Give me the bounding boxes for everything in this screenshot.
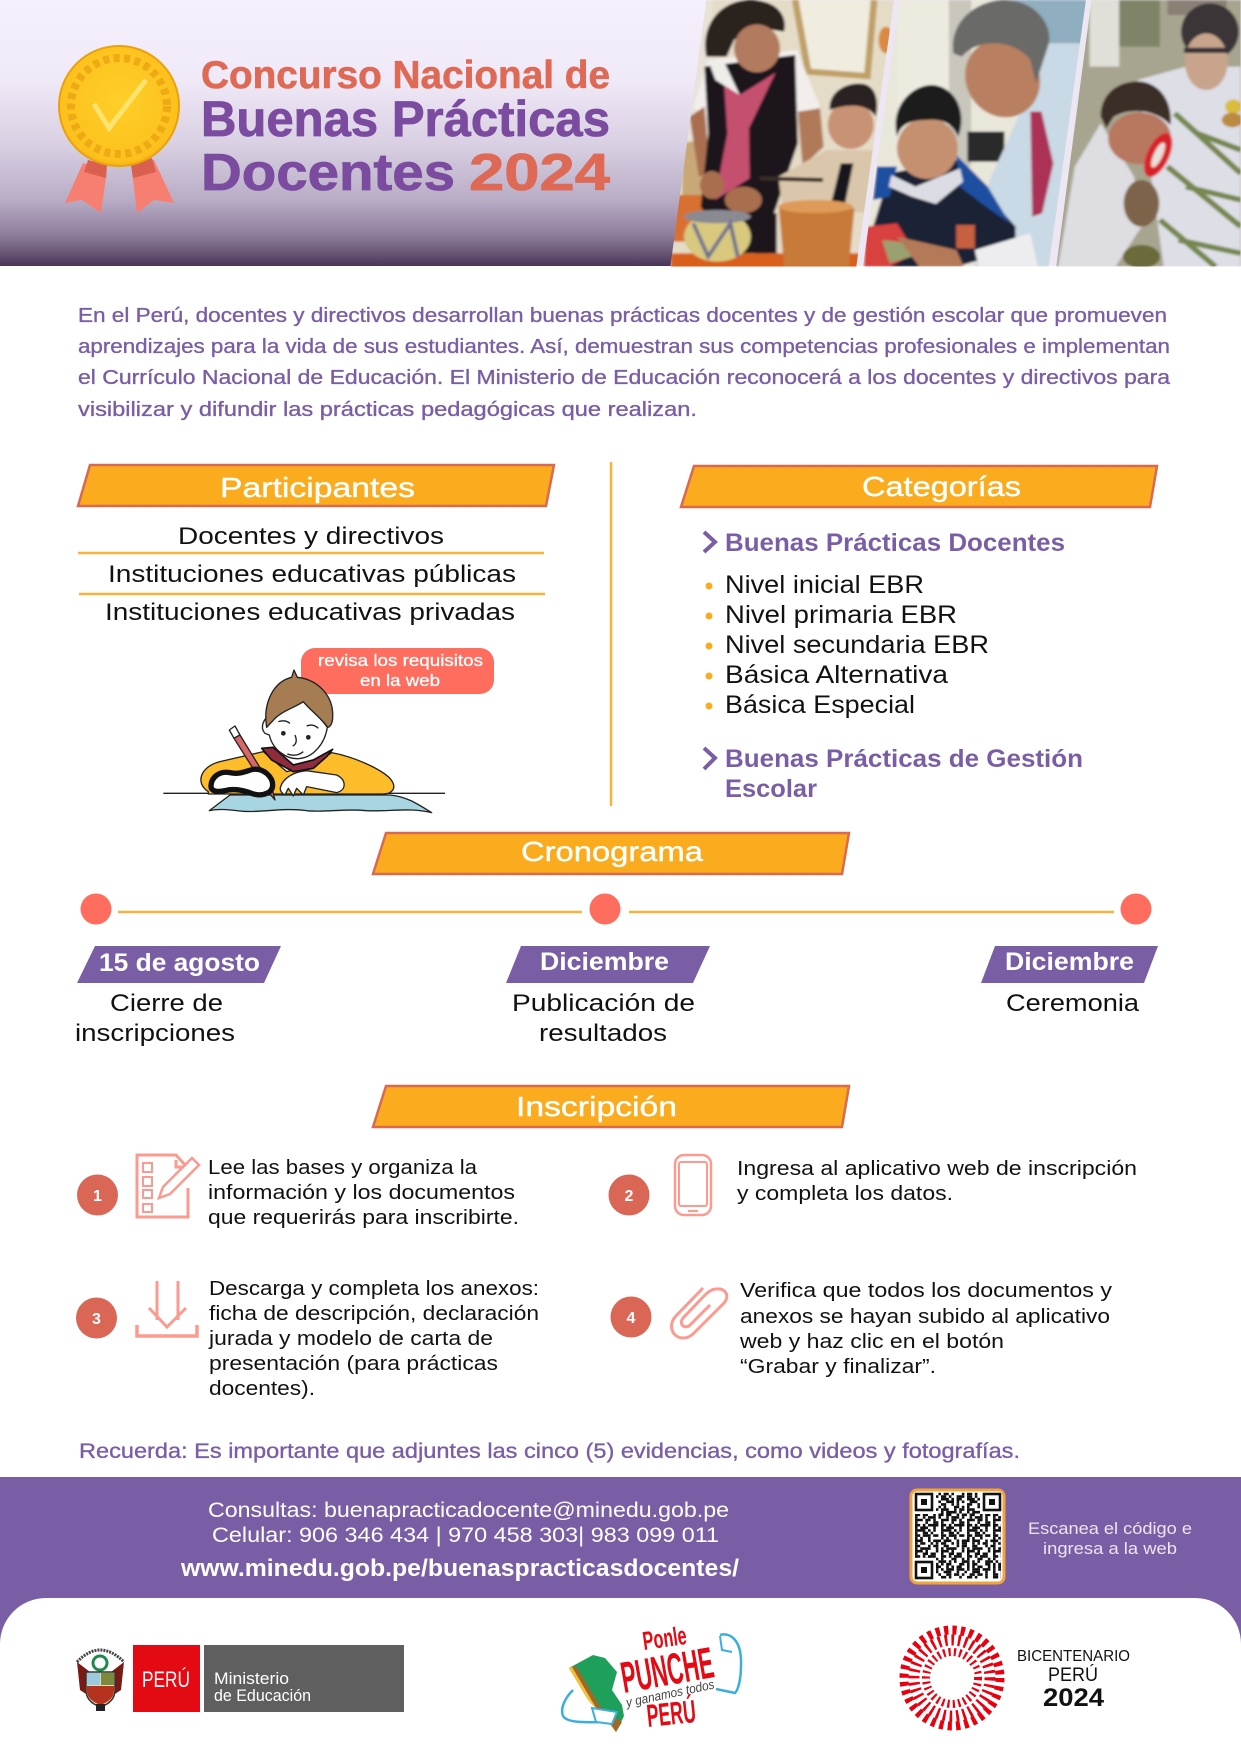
badge 3: [76, 1298, 117, 1338]
milestone: cierre de inscripciones: Cierre de: [110, 990, 223, 1017]
step 1 text: [208, 1157, 519, 1229]
logo: bicentenario perú 2024: 2024: [1043, 1684, 1104, 1712]
step 3 text: [208, 1278, 539, 1400]
qr caption: ingresa a la web: [1043, 1539, 1177, 1558]
step 1 text: Lee las bases y organiza la: [208, 1157, 478, 1179]
step 4 text: Verifica que todos los documentos y: [740, 1280, 1112, 1302]
badge 4: 4: [627, 1310, 636, 1327]
logo: bicentenario perú 2024: BICENTENARIO: [1017, 1648, 1130, 1665]
icon: gold medal: [59, 46, 179, 213]
timeline: [80, 894, 1152, 924]
category: buenas prácticas de gestión escolar: Buenas Prácticas de Gestión: [725, 745, 1083, 773]
title: 2024: [469, 144, 610, 202]
callout: revisa los requisitos: revisa los requisitos: [318, 651, 483, 670]
logo: perú ministerio de educación: Ministerio: [214, 1669, 289, 1688]
logo: ponle punche perú: y ganamos todos: [624, 1676, 716, 1710]
milestone: cierre de inscripciones: 15 de agosto: [99, 949, 260, 977]
qr caption: Escanea el código e: [1028, 1519, 1192, 1538]
participants list: Docentes y directivos: [178, 523, 444, 550]
heading: inscripción: Inscripción: [516, 1091, 677, 1122]
photo: teacher and boy with toy: [860, 0, 1090, 267]
qr caption: [1028, 1519, 1192, 1558]
logo: ponle punche perú: [562, 1620, 741, 1734]
intro paragraph: [78, 305, 1171, 421]
milestone: publicación de resultados: [506, 946, 710, 1047]
contact text: Celular: 906 346 434 | 970 458 303| 983 099 011: [212, 1524, 719, 1547]
intro paragraph: aprendizajes para la vida de sus estudiantes. Así, demuestran sus competencias profesionales e implementan: [78, 336, 1170, 358]
heading: cronograma: Cronograma: [521, 836, 703, 867]
logo: ponle punche perú: PERÚ: [645, 1693, 697, 1734]
photo collage: [660, 0, 1241, 268]
participants list: [78, 523, 545, 626]
panel: participantes: [78, 465, 554, 813]
logo: bicentenario perú 2024: [904, 1630, 1130, 1726]
category: buenas prácticas docentes: Buenas Prácticas Docentes: [725, 529, 1065, 557]
photo: teacher and boy with magnifying glass: [1053, 0, 1241, 268]
milestone: ceremonia: Ceremonia: [1006, 990, 1140, 1017]
icon: smartphone: [675, 1155, 711, 1215]
step 1 text: información y los documentos: [208, 1182, 515, 1204]
heading: participantes: [78, 465, 554, 506]
badge 2: 2: [625, 1188, 634, 1205]
panel: categorías: [681, 466, 1157, 803]
levels list: [706, 571, 989, 719]
header banner: [0, 0, 1241, 268]
callout: revisa los requisitos: [301, 648, 494, 694]
milestone: publicación de resultados: Diciembre: [540, 948, 669, 976]
heading: participantes: Participantes: [220, 472, 415, 503]
intro paragraph: visibilizar y difundir las prácticas pedagógicas que realizan.: [78, 399, 697, 421]
step 1 text: que requerirás para inscribirte.: [208, 1207, 519, 1229]
step 4 text: web y haz clic en el botón: [739, 1331, 1004, 1353]
levels list: Básica Alternativa: [725, 661, 948, 689]
milestone: publicación de resultados: Publicación de: [512, 990, 695, 1017]
icon: download: [137, 1281, 197, 1336]
contact text: www.minedu.gob.pe/buenaspracticasdocentes/: [180, 1555, 739, 1582]
step 3 text: docentes).: [209, 1378, 315, 1400]
badge 3: 3: [92, 1311, 101, 1328]
step 1: [77, 1155, 519, 1229]
badge 1: 1: [93, 1188, 102, 1205]
qr code: [911, 1490, 1004, 1583]
title: Concurso Nacional de: [201, 54, 610, 97]
contact text: [180, 1499, 739, 1582]
participants list: Instituciones educativas privadas: [105, 599, 515, 626]
photo: teacher and boy with drums: [660, 0, 901, 268]
logo: ponle punche perú: PUNCHE: [617, 1638, 717, 1703]
reminder text: Recuerda: Es importante que adjuntes las cinco (5) evidencias, como videos y fotografías.: [79, 1440, 1020, 1463]
icon: checklist and pencil: [137, 1155, 199, 1217]
step 4 text: “Grabar y finalizar”.: [740, 1356, 936, 1378]
participants list: Instituciones educativas públicas: [108, 561, 516, 588]
category: buenas prácticas de gestión escolar: Escolar: [725, 775, 817, 803]
logo: ponle punche perú: Ponle: [641, 1620, 688, 1656]
divider: vertical line: [610, 462, 612, 806]
heading: categorías: [681, 466, 1157, 507]
step 3 text: jurada y modelo de carta de: [208, 1328, 493, 1350]
step 4 text: anexos se hayan subido al aplicativo: [740, 1306, 1110, 1328]
step 4 text: [739, 1280, 1112, 1378]
footer: contact band: [0, 1477, 1241, 1647]
title: [201, 54, 610, 202]
step 3 text: Descarga y completa los anexos:: [209, 1278, 539, 1300]
step 3 text: ficha de descripción, declaración: [209, 1303, 539, 1325]
badge 4: [610, 1296, 652, 1338]
badge 2: [608, 1174, 650, 1216]
levels list: Básica Especial: [725, 691, 915, 719]
logo: bicentenario perú 2024: PERÚ: [1048, 1664, 1098, 1686]
heading: inscripción: [373, 1086, 849, 1127]
milestone: ceremonia: Diciembre: [1005, 948, 1134, 976]
logo: perú ministerio de educación: PERÚ: [142, 1667, 190, 1692]
step 3: [76, 1278, 539, 1400]
levels list: Nivel secundaria EBR: [725, 631, 989, 659]
logo: perú ministerio de educación: de Educación: [214, 1686, 311, 1705]
badge 1: [77, 1174, 118, 1216]
milestone: publicación de resultados: resultados: [539, 1020, 667, 1047]
step 3 text: presentación (para prácticas: [209, 1353, 498, 1375]
levels list: Nivel inicial EBR: [725, 571, 924, 599]
levels list: Nivel primaria EBR: [725, 601, 957, 629]
category: buenas prácticas de gestión escolar: [704, 745, 1083, 803]
step 4: [610, 1280, 1112, 1378]
illustration: child writing: [163, 670, 445, 813]
contact text: Consultas: buenapracticadocente@minedu.gob.pe: [208, 1499, 729, 1522]
callout: revisa los requisitos: en la web: [360, 671, 440, 690]
footer: logo strip: [0, 1598, 1241, 1754]
heading: cronograma: [373, 833, 849, 874]
title: Docentes: [201, 144, 455, 202]
step 2 text: [737, 1158, 1137, 1205]
heading: categorías: Categorías: [862, 471, 1021, 502]
milestone: cierre de inscripciones: inscripciones: [75, 1020, 235, 1047]
step 2: [608, 1155, 1137, 1216]
icon: paperclip: [672, 1288, 727, 1338]
milestone: cierre de inscripciones: [75, 946, 281, 1047]
title: Buenas Prácticas: [201, 91, 610, 147]
milestone: ceremonia: [981, 946, 1158, 1017]
intro paragraph: En el Perú, docentes y directivos desarrollan buenas prácticas docentes y de gestión escolar que promueven: [78, 305, 1167, 327]
step 2 text: Ingresa al aplicativo web de inscripción: [737, 1158, 1137, 1180]
logo: perú ministerio de educación: [133, 1645, 404, 1712]
intro paragraph: el Currículo Nacional de Educación. El Ministerio de Educación reconocerá a los docentes y directivos para: [78, 367, 1171, 389]
panel: cronograma: [75, 833, 1158, 1047]
panel: inscripción: [76, 1086, 1137, 1400]
step 2 text: y completa los datos.: [737, 1183, 953, 1205]
logo: peruvian crest: [77, 1650, 124, 1711]
